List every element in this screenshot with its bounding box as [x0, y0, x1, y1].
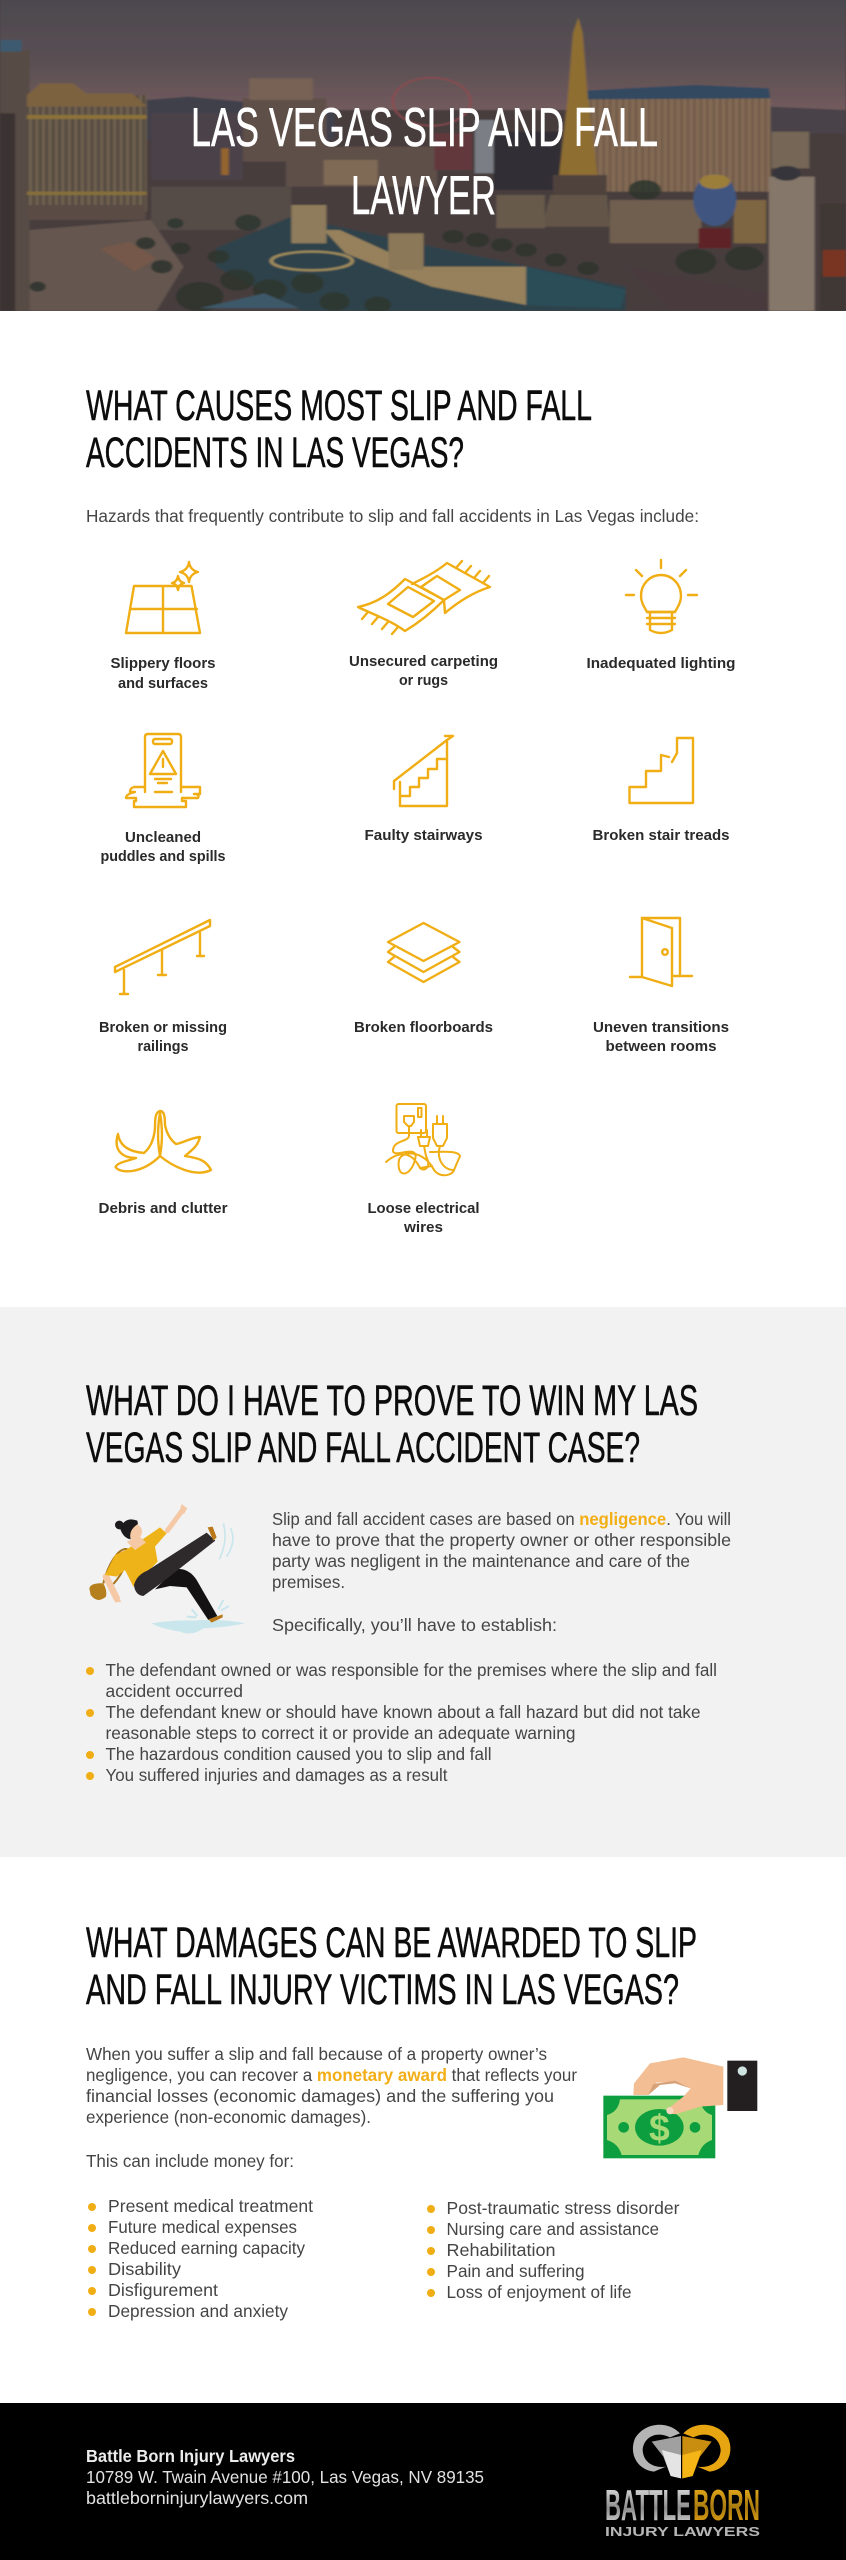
panel: what to prove — [0, 1307, 846, 1857]
logo: wordmark: INJURY LAWYERS — [605, 2524, 760, 2539]
list: elements to prove: The defendant owned or was responsible for the premises where the slip and fall — [106, 1660, 717, 1680]
text: monetary award: negligence, you can recover a monetary award that reflects your — [86, 2065, 577, 2085]
illustration: hand holding cash: $ — [649, 2107, 670, 2149]
illustration: woman slipping — [89, 1504, 245, 1634]
list: elements to prove: The hazardous condition caused you to slip and fall — [106, 1744, 492, 1764]
text: monetary award: When you suffer a slip and fall because of a property owner’s — [86, 2044, 547, 2064]
list: elements to prove: You suffered injuries and damages as a result — [106, 1765, 448, 1785]
text: negligence — [272, 1509, 731, 1635]
text: negligence: have to prove that the property owner or other responsible — [272, 1530, 731, 1550]
footer contact details: 10789 W. Twain Avenue #100, Las Vegas, NV 89135 — [86, 2467, 484, 2487]
footer contact details — [86, 2446, 484, 2508]
item: floorboards — [354, 923, 493, 1036]
text: monetary award — [86, 2044, 577, 2171]
text: negligence: Slip and fall accident cases are based on negligence. You will — [272, 1509, 731, 1529]
item: faulty stairways — [364, 736, 482, 844]
section: damages — [86, 1919, 757, 2321]
item: unsecured carpeting: Unsecured carpeting — [349, 653, 498, 670]
item: slippery floors: Slippery floors — [110, 655, 216, 672]
heading: causes: WHAT CAUSES MOST SLIP AND FALL — [86, 382, 592, 430]
icon: rug — [358, 561, 490, 634]
text: monetary award: experience (non-economic damages). — [86, 2107, 371, 2127]
item: railings: Broken or missing — [99, 1019, 227, 1036]
section: causes — [86, 382, 736, 1236]
list: damages right column — [427, 2198, 680, 2302]
item: inadequate lighting — [586, 560, 736, 672]
icon: light bulb — [626, 560, 697, 633]
list: elements to prove: accident occurred — [106, 1681, 243, 1701]
item: floorboards: Broken floorboards — [354, 1019, 493, 1036]
item: railings: railings — [138, 1038, 188, 1055]
icon: stacked floorboards — [388, 923, 460, 982]
text: negligence: party was negligent in the maintenance and care of the — [272, 1551, 690, 1571]
icon: banana peel — [116, 1111, 211, 1173]
item: slippery floors: and surfaces — [118, 675, 208, 692]
list: damages right column: Nursing care and assistance — [446, 2219, 659, 2239]
item: uneven transitions: between rooms — [606, 1038, 716, 1055]
item: railings — [99, 920, 227, 1055]
text: monetary award: This can include money for: — [86, 2151, 294, 2171]
footer contact details: Battle Born Injury Lawyers — [86, 2446, 295, 2466]
skyline photo — [0, 0, 846, 313]
text: negligence: Specifically, you’ll have to establish: — [272, 1615, 557, 1635]
footer contact details: battleborninjurylawyers.com — [86, 2488, 308, 2508]
item: debris — [98, 1111, 228, 1217]
item: uneven transitions: Uneven transitions — [593, 1019, 729, 1036]
list: damages left column: Depression and anxiety — [108, 2301, 288, 2321]
logo: wordmark: BORN — [693, 2481, 760, 2530]
list: damages right column: Pain and suffering — [446, 2261, 584, 2281]
item: faulty stairways: Faulty stairways — [364, 827, 482, 844]
item: unsecured carpeting — [349, 561, 498, 689]
hero banner: Las Vegas skyline — [0, 0, 846, 313]
icon: railing — [115, 920, 210, 994]
list: elements to prove: reasonable steps to correct it or provide an adequate warning — [106, 1723, 576, 1743]
item: debris: Debris and clutter — [98, 1200, 228, 1217]
intro text: hazards: Hazards that frequently contribute to slip and fall accidents in Las Vegas include: — [86, 506, 699, 526]
item: uneven transitions — [593, 918, 729, 1055]
logo: ram head — [633, 2425, 730, 2478]
item: electrical wires — [368, 1104, 480, 1236]
list: damages right column: Loss of enjoyment of life — [446, 2282, 632, 2302]
logo: Battle Born — [605, 2425, 760, 2539]
icon: wet floor sign — [126, 734, 200, 807]
list: elements to prove — [86, 1660, 717, 1785]
list: damages right column: Post-traumatic stress disorder — [446, 2198, 680, 2218]
list: damages right column: Rehabilitation — [446, 2240, 556, 2260]
list: damages left column: Disfigurement — [108, 2280, 218, 2300]
hero title: LAWYER — [351, 164, 496, 226]
logo: wordmark: BATTLE — [605, 2481, 691, 2530]
item: uncleaned puddles: Uncleaned — [125, 829, 201, 846]
item: broken stair treads: Broken stair treads — [592, 827, 730, 844]
icon: floor tiles with sparkles — [126, 562, 200, 633]
heading: causes: ACCIDENTS IN LAS VEGAS? — [86, 429, 464, 477]
list: damages left column — [88, 2196, 313, 2321]
list: damages left column: Present medical treatment — [108, 2196, 313, 2216]
icon: tangled plugs and wires — [386, 1104, 460, 1175]
heading: damages — [86, 1919, 697, 2014]
hero title — [194, 107, 657, 214]
item: inadequate lighting: Inadequated lighting — [586, 655, 736, 672]
list: damages left column: Reduced earning capacity — [108, 2238, 305, 2258]
item: electrical wires: Loose electrical — [368, 1200, 480, 1217]
item: uncleaned puddles: puddles and spills — [100, 848, 226, 865]
list: damages left column: Future medical expenses — [108, 2217, 297, 2237]
icon: stairway with rail — [394, 736, 453, 806]
heading: proof — [86, 1377, 698, 1472]
heading: causes — [86, 382, 592, 477]
list: elements to prove: The defendant knew or should have known about a fall hazard but did not take — [106, 1702, 700, 1722]
text: monetary award: financial losses (economic damages) and the suffering you — [86, 2086, 554, 2106]
list: damages left column: Disability — [108, 2259, 181, 2279]
icon: door — [630, 918, 692, 986]
footer — [0, 2403, 846, 2560]
item: slippery floors — [110, 562, 216, 692]
item: electrical wires: wires — [403, 1219, 443, 1236]
text: negligence: premises. — [272, 1572, 345, 1592]
item: unsecured carpeting: or rugs — [399, 672, 448, 689]
item: broken stair treads — [592, 738, 730, 844]
illustration: hand holding cash — [603, 2057, 757, 2158]
item: uncleaned puddles — [100, 734, 226, 865]
icon: broken stairs — [630, 738, 693, 803]
